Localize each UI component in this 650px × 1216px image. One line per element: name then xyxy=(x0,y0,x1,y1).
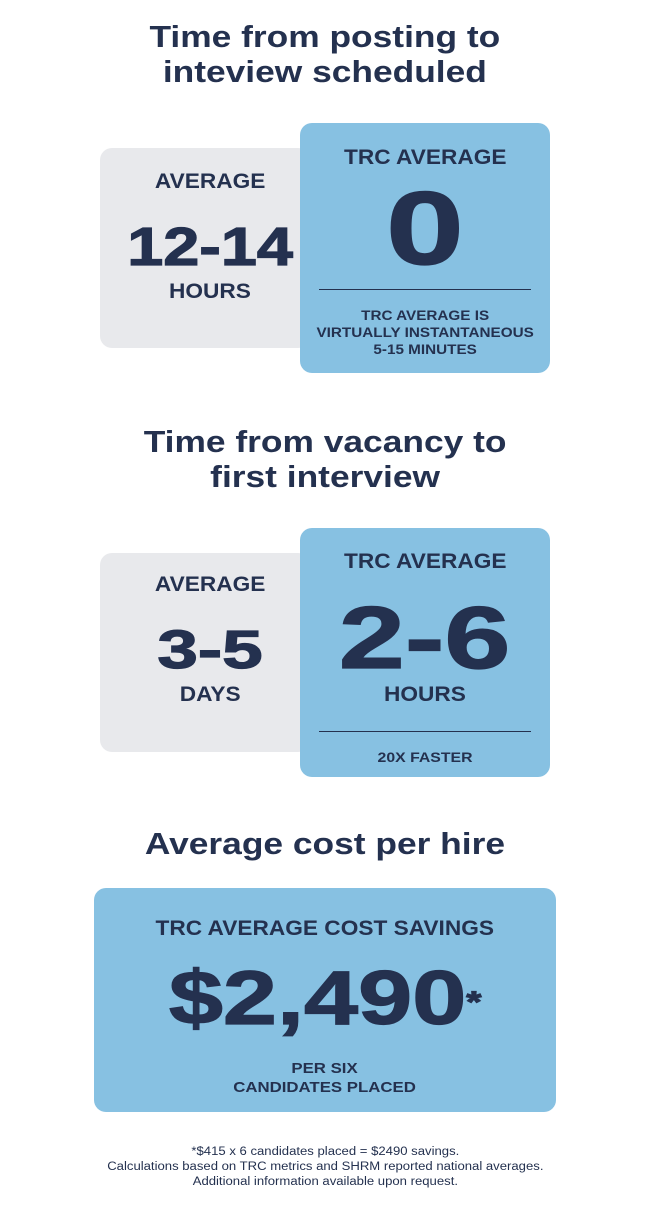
footnote: Calculations based on TRC metrics and SHRM reported national averages. xyxy=(107,1161,543,1173)
label: TRC AVERAGE COST SAVINGS xyxy=(156,917,494,940)
label: hours: HOURS xyxy=(384,683,466,706)
title 1: Time from posting to xyxy=(150,19,500,54)
title 1 xyxy=(150,19,500,89)
panel: average 2 xyxy=(100,553,310,752)
sublabel: CANDIDATES PLACED xyxy=(234,1079,416,1096)
number: 12-14: 12-14 xyxy=(127,217,293,277)
label: hours: HOURS xyxy=(169,280,251,303)
title 2: first interview xyxy=(210,459,440,494)
title 3: Average cost per hire xyxy=(145,826,505,861)
label: average: AVERAGE xyxy=(155,170,265,193)
title 2 xyxy=(144,424,506,494)
footnote xyxy=(107,1146,543,1188)
note: TRC AVERAGE IS xyxy=(361,308,489,323)
number: 3-5: 3-5 xyxy=(157,620,263,680)
number: 0: 0 xyxy=(386,171,464,287)
sublabel: PER SIX xyxy=(292,1060,358,1077)
number: 2-6: 2-6 xyxy=(339,588,511,687)
panel: cost savings xyxy=(94,888,556,1112)
title 1: inteview scheduled xyxy=(163,54,487,89)
note: 5-15 MINUTES xyxy=(373,342,477,357)
label: trc average: TRC AVERAGE xyxy=(344,146,506,169)
label: trc average: TRC AVERAGE xyxy=(344,550,506,573)
footnote: *$415 x 6 candidates placed = $2490 savings. xyxy=(191,1146,459,1158)
note: VIRTUALLY INSTANTANEOUS xyxy=(316,325,534,340)
title 2: Time from vacancy to xyxy=(144,424,506,459)
panel: trc 2 xyxy=(300,528,550,777)
panel: trc 1 xyxy=(300,123,550,373)
panel: average 1 xyxy=(100,148,310,348)
note: 20x faster: 20X FASTER xyxy=(378,749,472,765)
footnote: Additional information available upon request. xyxy=(192,1176,458,1188)
number: $2,490: $2,490* xyxy=(169,956,481,1041)
note xyxy=(316,308,534,357)
label: average: AVERAGE xyxy=(155,573,265,596)
sublabel xyxy=(234,1060,416,1096)
label: days: DAYS xyxy=(180,683,240,706)
